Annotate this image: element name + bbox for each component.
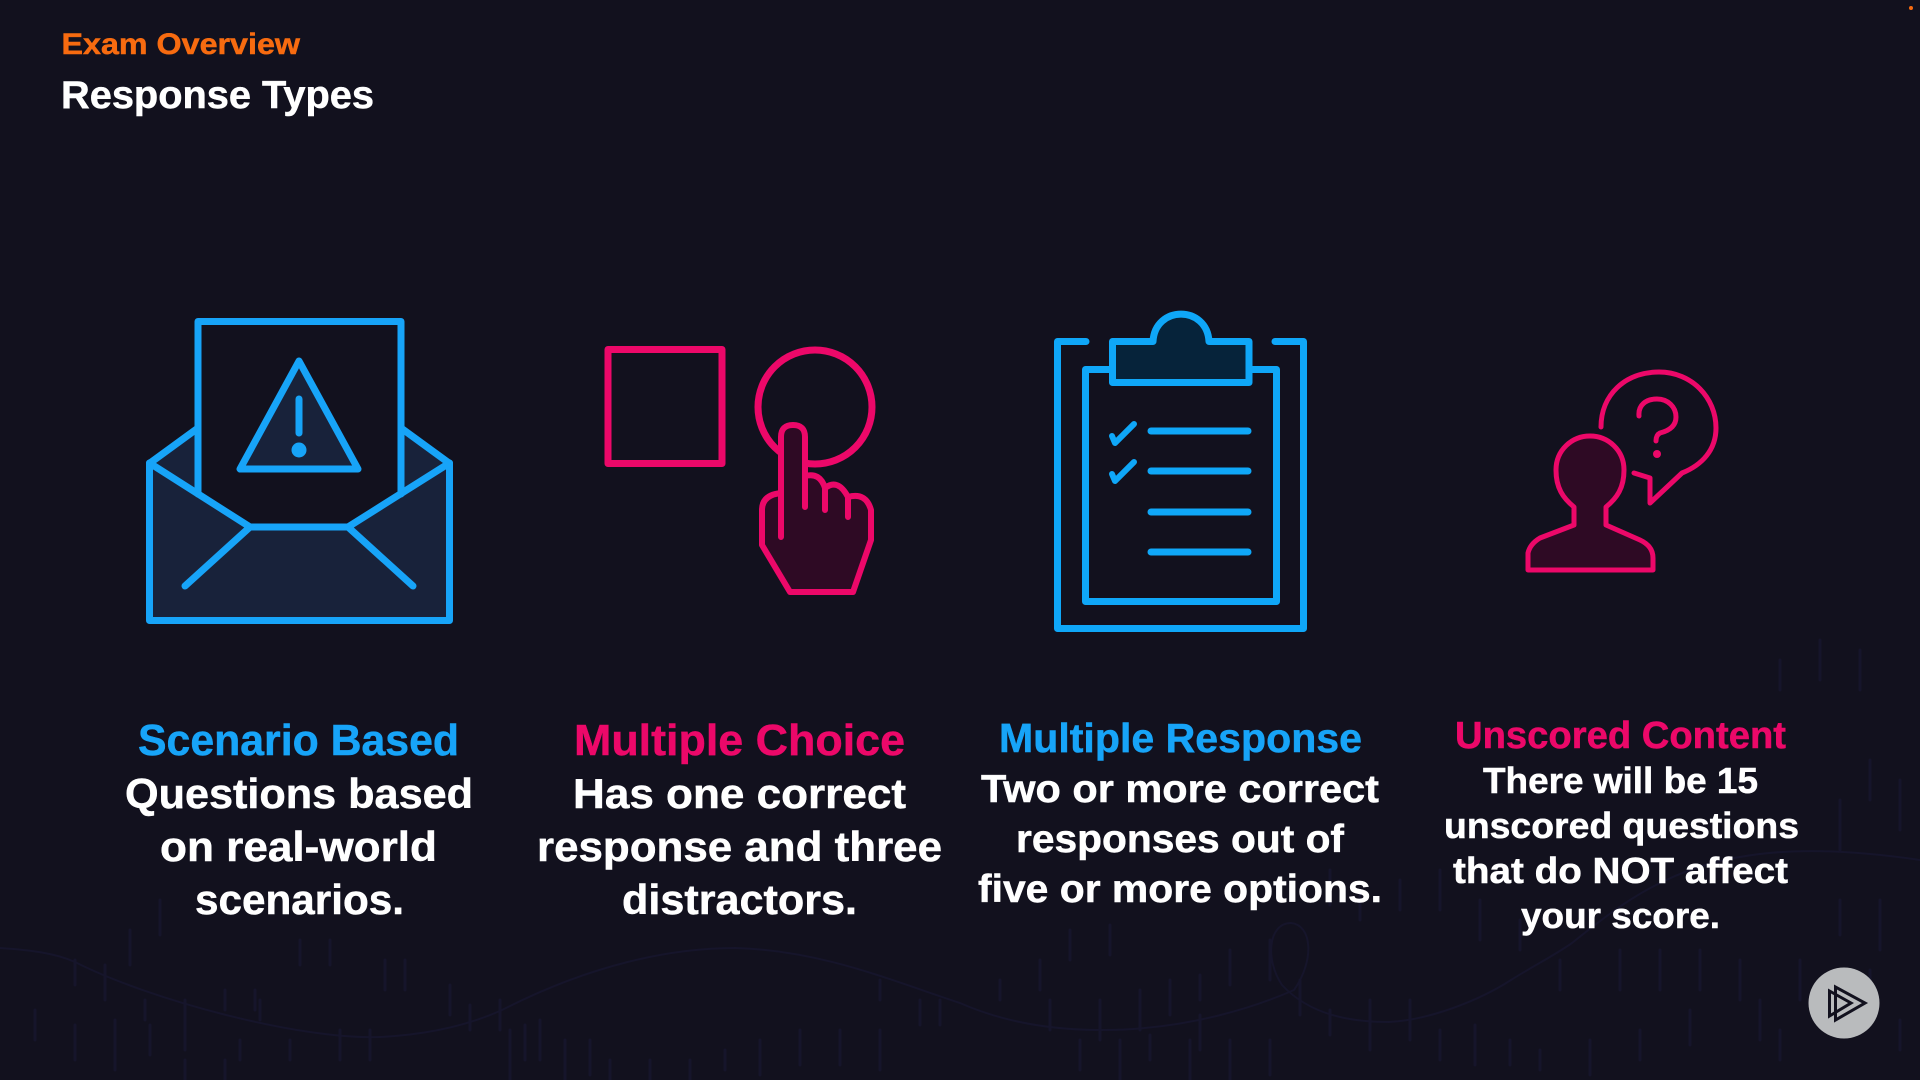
description: distractors.	[622, 876, 857, 923]
title block	[61, 28, 374, 117]
description: unscored questions	[1444, 805, 1799, 846]
description: Has one correct	[573, 770, 906, 817]
icon: envelope with warning	[150, 322, 450, 620]
marker: corner dot	[1909, 6, 1913, 10]
icon: play logo button	[1808, 968, 1880, 1038]
panel: unscored content	[1444, 715, 1799, 936]
description: responses out of	[1016, 818, 1345, 861]
panel: multiple response	[978, 715, 1382, 911]
icon: clipboard checklist	[1058, 314, 1304, 628]
description: Two or more correct	[981, 768, 1379, 811]
description	[978, 768, 1382, 911]
description: that do NOT affect	[1453, 850, 1788, 891]
heading: Multiple Choice	[574, 716, 905, 765]
square option	[608, 350, 722, 464]
description: Questions based	[125, 770, 473, 817]
icon: person with question bubble	[1528, 372, 1716, 570]
panel: scenario based	[125, 716, 473, 923]
heading: Scenario Based	[138, 716, 459, 765]
heading: Response Types	[61, 74, 374, 117]
description: your score.	[1521, 895, 1720, 936]
description: five or more options.	[978, 868, 1382, 911]
round option	[758, 350, 872, 464]
description	[125, 770, 473, 923]
description: scenarios.	[195, 876, 404, 923]
hand	[762, 425, 871, 592]
heading: Multiple Response	[999, 715, 1362, 761]
icon: selection square and circle with pointing hand	[608, 350, 872, 592]
description: response and three	[537, 823, 942, 870]
description	[1444, 760, 1799, 936]
section label: Exam Overview	[62, 28, 301, 61]
panel: multiple choice	[537, 716, 942, 923]
description	[537, 770, 942, 923]
description: on real-world	[160, 823, 437, 870]
description: There will be 15	[1483, 760, 1758, 801]
heading: Unscored Content	[1455, 715, 1786, 757]
